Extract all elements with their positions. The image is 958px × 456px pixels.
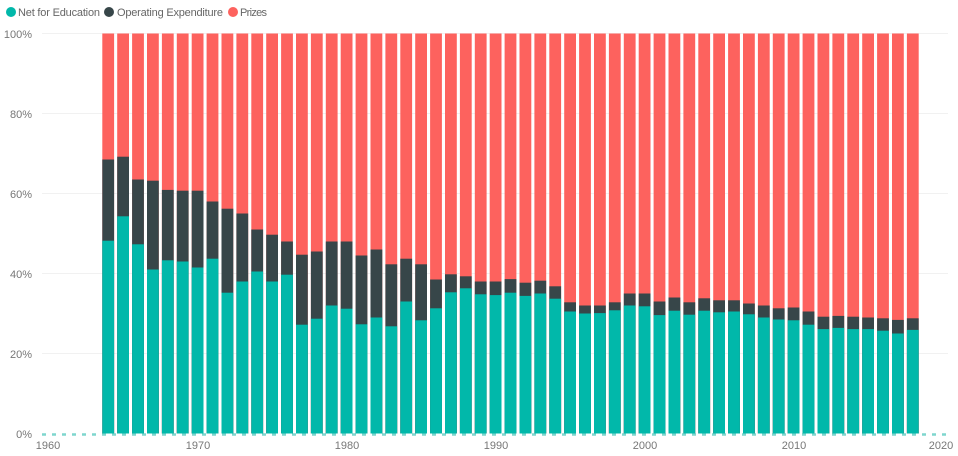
zero baseline dashed line	[42, 433, 948, 436]
x axis labels: 1980	[335, 440, 359, 452]
x axis labels: 1960	[36, 440, 60, 452]
stacked bars	[102, 34, 919, 434]
x axis labels: 2000	[633, 440, 657, 452]
legend	[6, 7, 268, 19]
legend item: Operating Expenditure: Operating Expenditure	[117, 7, 223, 19]
y axis labels	[4, 29, 32, 441]
series: Operating Expenditure	[102, 157, 919, 434]
legend item: Net for Education: Net for Education	[18, 7, 100, 19]
x axis labels: 2020	[929, 440, 953, 452]
y axis labels: 20%	[10, 349, 32, 361]
y axis labels: 60%	[10, 189, 32, 201]
x axis labels: 1970	[186, 440, 210, 452]
series: Prizes	[102, 34, 919, 434]
legend item: Prizes: Prizes	[240, 7, 268, 19]
legend item: Prizes	[228, 7, 268, 19]
y axis labels: 0%	[16, 429, 32, 441]
x axis labels: 2010	[782, 440, 806, 452]
y axis labels: 40%	[10, 269, 32, 281]
series: Net for Education	[102, 216, 919, 434]
x axis labels	[36, 440, 953, 452]
x axis labels: 1990	[484, 440, 508, 452]
y axis labels: 80%	[10, 109, 32, 121]
y axis labels: 100%	[4, 29, 32, 41]
